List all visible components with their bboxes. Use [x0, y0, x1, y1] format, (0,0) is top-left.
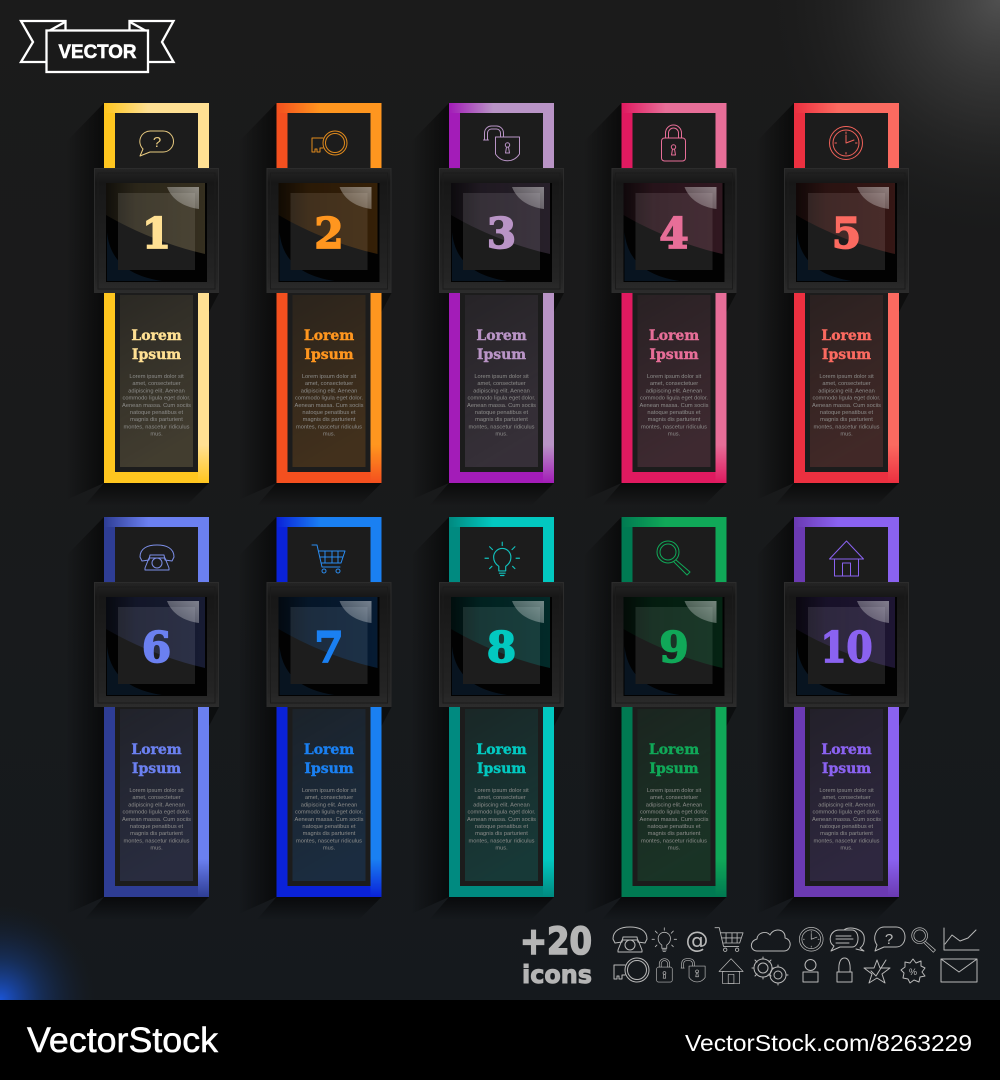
- card 10 number tile: [784, 582, 909, 707]
- card 2 text panel: [292, 295, 366, 467]
- icon: line chart: [944, 928, 979, 950]
- body text: amet, consectetuer: [822, 795, 871, 801]
- icon: telephone: [140, 545, 174, 570]
- icon: question bubble: [140, 131, 174, 156]
- body text: magnis dis parturient: [303, 417, 356, 423]
- label: +20 icons: [520, 920, 592, 989]
- body text: natoque penatibus et: [130, 410, 183, 416]
- heading: Lorem: [821, 328, 872, 344]
- number 7: 7: [314, 623, 344, 672]
- card 8 number tile: [439, 582, 564, 707]
- heading: Ipsum: [477, 347, 526, 363]
- body text: natoque penatibus et: [130, 824, 183, 830]
- body text: amet, consectetuer: [305, 381, 353, 387]
- body text: commodo ligula eget dolor.: [640, 810, 708, 816]
- body text: Lorem ipsum dolor sit: [474, 788, 529, 794]
- icon: woman: [837, 958, 852, 982]
- icon: cloud: [751, 930, 790, 951]
- card 4 frame: [622, 103, 726, 483]
- body text: Aenean massa. Cum sociis: [640, 817, 709, 823]
- body text: montes, nascetur ridiculus: [296, 424, 362, 430]
- heading: Lorem: [821, 742, 872, 758]
- body text: Lorem ipsum dolor sit: [647, 374, 702, 380]
- heading: Lorem: [304, 742, 354, 758]
- card 9 text panel: [638, 709, 710, 881]
- heading: Lorem: [649, 742, 699, 758]
- number 9: 9: [659, 623, 689, 672]
- card 2 number tile: [266, 168, 392, 293]
- body text: magnis dis parturient: [648, 417, 701, 423]
- body text: commodo ligula eget dolor.: [468, 396, 536, 402]
- body text: montes, nascetur ridiculus: [641, 838, 707, 844]
- card 7: [258, 517, 392, 909]
- body text: Aenean massa. Cum sociis: [812, 403, 881, 409]
- card 2 frame: [276, 103, 382, 483]
- number 6: 6: [142, 623, 171, 672]
- icon: house: [719, 959, 743, 984]
- body text: mus.: [150, 846, 163, 852]
- body text: adipiscing elit. Aenean: [818, 802, 875, 808]
- icon: question bubble: [875, 927, 905, 951]
- body text: adipiscing elit. Aenean: [646, 388, 702, 394]
- card 8 text panel: [465, 709, 538, 881]
- body text: montes, nascetur ridiculus: [468, 424, 535, 430]
- body text: montes, nascetur ridiculus: [123, 424, 190, 430]
- card 7 text panel: [292, 709, 366, 881]
- body text: mus.: [323, 846, 336, 852]
- icon: clock: [830, 126, 862, 160]
- body text: adipiscing elit. Aenean: [128, 802, 185, 808]
- body text: natoque penatibus et: [302, 824, 356, 830]
- card 10 frame: [794, 517, 899, 897]
- body text: montes, nascetur ridiculus: [641, 424, 707, 430]
- card 3: [431, 103, 564, 494]
- footer bar: [0, 1000, 1000, 1080]
- icon set: [613, 927, 979, 985]
- card 9: [602, 517, 736, 909]
- body text: commodo ligula eget dolor.: [295, 396, 363, 402]
- body text: Lorem ipsum dolor sit: [474, 374, 529, 380]
- icon: discount burst: [901, 959, 925, 983]
- heading: Lorem: [131, 328, 182, 344]
- number 4: 4: [659, 209, 689, 258]
- icon: key: [614, 958, 649, 982]
- body text: mus.: [668, 432, 681, 438]
- card 1 text panel: [120, 295, 193, 467]
- body text: montes, nascetur ridiculus: [813, 424, 880, 430]
- body text: natoque penatibus et: [475, 824, 528, 830]
- card 5 number tile: [784, 168, 909, 293]
- body text: Aenean massa. Cum sociis: [122, 817, 191, 823]
- number 1: 1: [142, 209, 171, 258]
- footer url: VectorStock.com/8263229: [685, 1030, 972, 1056]
- body text: adipiscing elit. Aenean: [473, 388, 530, 394]
- badge: vector ribbon: VECTOR: [58, 42, 137, 63]
- icon: telephone: [613, 927, 647, 952]
- body text: adipiscing elit. Aenean: [818, 388, 875, 394]
- body text: adipiscing elit. Aenean: [646, 802, 702, 808]
- body text: mus.: [495, 846, 508, 852]
- heading: Lorem: [649, 328, 699, 344]
- body text: commodo ligula eget dolor.: [295, 810, 363, 816]
- body text: montes, nascetur ridiculus: [123, 838, 190, 844]
- heading: Ipsum: [822, 347, 871, 363]
- icon: magnifier: [912, 928, 935, 952]
- body text: mus.: [668, 846, 681, 852]
- heading: Ipsum: [822, 761, 871, 777]
- body text: Lorem ipsum dolor sit: [819, 788, 874, 794]
- card 5: [776, 103, 909, 494]
- body text: magnis dis parturient: [130, 417, 183, 423]
- card 6 frame: [104, 517, 209, 897]
- body text: natoque penatibus et: [647, 410, 701, 416]
- card 9 frame: [622, 517, 726, 897]
- card 3 text panel: [465, 295, 538, 467]
- body text: magnis dis parturient: [303, 831, 356, 837]
- body text: Lorem ipsum dolor sit: [302, 788, 357, 794]
- icon: at sign: @: [686, 928, 708, 954]
- body text: commodo ligula eget dolor.: [123, 396, 191, 402]
- heading: Ipsum: [132, 347, 181, 363]
- body text: commodo ligula eget dolor.: [813, 396, 881, 402]
- body text: amet, consectetuer: [822, 381, 871, 387]
- body text: Lorem ipsum dolor sit: [819, 374, 874, 380]
- body text: Lorem ipsum dolor sit: [302, 374, 357, 380]
- card 6 text panel: [120, 709, 193, 881]
- body text: amet, consectetuer: [477, 795, 526, 801]
- body text: magnis dis parturient: [130, 831, 183, 837]
- body text: natoque penatibus et: [820, 410, 873, 416]
- icon: magnifier: [657, 541, 690, 575]
- card 3 number tile: [439, 168, 564, 293]
- icon: key: [312, 131, 347, 155]
- body text: montes, nascetur ridiculus: [468, 838, 535, 844]
- body text: commodo ligula eget dolor.: [813, 810, 881, 816]
- body text: adipiscing elit. Aenean: [301, 802, 357, 808]
- heading: Ipsum: [132, 761, 181, 777]
- body text: Aenean massa. Cum sociis: [812, 817, 881, 823]
- body text: amet, consectetuer: [305, 795, 353, 801]
- card 1 frame: [104, 103, 209, 483]
- body text: natoque penatibus et: [475, 410, 528, 416]
- heading: Lorem: [131, 742, 182, 758]
- heading: Ipsum: [477, 761, 526, 777]
- icon: question bubble: ?: [153, 134, 161, 151]
- body text: mus.: [840, 432, 853, 438]
- icon: man: [803, 960, 818, 982]
- body text: mus.: [150, 432, 163, 438]
- body text: montes, nascetur ridiculus: [296, 838, 362, 844]
- body text: amet, consectetuer: [132, 381, 181, 387]
- body text: amet, consectetuer: [650, 795, 698, 801]
- body text: mus.: [495, 432, 508, 438]
- body text: montes, nascetur ridiculus: [813, 838, 880, 844]
- card 1 number tile: [94, 168, 219, 293]
- heading: Ipsum: [649, 761, 699, 777]
- heading: Lorem: [304, 328, 354, 344]
- heading: Lorem: [476, 328, 527, 344]
- icon: cart: [715, 928, 743, 952]
- body text: Aenean massa. Cum sociis: [295, 403, 364, 409]
- body text: amet, consectetuer: [477, 381, 526, 387]
- body text: adipiscing elit. Aenean: [301, 388, 357, 394]
- card 4 text panel: [638, 295, 710, 467]
- card 10: [774, 517, 909, 909]
- body text: natoque penatibus et: [820, 824, 873, 830]
- body text: amet, consectetuer: [132, 795, 181, 801]
- icon: question bubble: ?: [885, 931, 893, 948]
- body text: amet, consectetuer: [650, 381, 698, 387]
- icon: star: [864, 960, 890, 983]
- heading: Ipsum: [304, 347, 354, 363]
- label: +20 icons: icons: [522, 960, 592, 989]
- heading: Ipsum: [304, 761, 354, 777]
- body text: Aenean massa. Cum sociis: [467, 817, 536, 823]
- body text: mus.: [323, 432, 336, 438]
- card 7 frame: [276, 517, 382, 897]
- number 3: 3: [487, 209, 516, 258]
- body text: Lorem ipsum dolor sit: [129, 374, 184, 380]
- body text: Aenean massa. Cum sociis: [467, 403, 536, 409]
- footer logo: VectorStock: [27, 1021, 219, 1060]
- card 10 text panel: [810, 709, 883, 881]
- body text: Lorem ipsum dolor sit: [647, 788, 702, 794]
- card 2: [258, 103, 392, 494]
- body text: commodo ligula eget dolor.: [468, 810, 536, 816]
- icon: clock: [799, 927, 823, 951]
- number 2: 2: [314, 209, 344, 258]
- body text: Aenean massa. Cum sociis: [122, 403, 191, 409]
- card 4 number tile: [612, 168, 736, 293]
- icon: open lock: [484, 126, 520, 161]
- card 8: [430, 517, 564, 909]
- heading: Ipsum: [649, 347, 699, 363]
- body text: magnis dis parturient: [648, 831, 701, 837]
- heading: Lorem: [476, 742, 527, 758]
- icon: house: [830, 541, 864, 576]
- number 10: 10: [820, 623, 872, 672]
- body text: magnis dis parturient: [820, 831, 873, 837]
- icon: shopping cart: [312, 545, 345, 573]
- body text: Aenean massa. Cum sociis: [640, 403, 709, 409]
- icon: open lock: [681, 959, 705, 982]
- icon: lock: [657, 959, 672, 982]
- body text: adipiscing elit. Aenean: [128, 388, 185, 394]
- card 1: [86, 103, 219, 494]
- card 3 frame: [449, 103, 554, 483]
- icon: discount burst: %: [909, 967, 917, 977]
- body text: commodo ligula eget dolor.: [640, 396, 708, 402]
- card 5 frame: [794, 103, 899, 483]
- body text: magnis dis parturient: [475, 831, 528, 837]
- icon: lock: [662, 125, 686, 161]
- card 4: [604, 103, 736, 494]
- body text: Lorem ipsum dolor sit: [129, 788, 184, 794]
- body text: natoque penatibus et: [647, 824, 701, 830]
- card 9 number tile: [612, 582, 736, 707]
- body text: commodo ligula eget dolor.: [123, 810, 191, 816]
- icon: bulb: [652, 928, 677, 952]
- body text: mus.: [840, 846, 853, 852]
- body text: magnis dis parturient: [820, 417, 873, 423]
- body text: magnis dis parturient: [475, 417, 528, 423]
- icon: speech bubbles: [830, 928, 864, 951]
- card 8 frame: [449, 517, 554, 897]
- icon: light bulb: [485, 542, 520, 576]
- body text: Aenean massa. Cum sociis: [295, 817, 364, 823]
- card 6 number tile: [94, 582, 219, 707]
- number 8: 8: [487, 623, 516, 672]
- body text: natoque penatibus et: [302, 410, 356, 416]
- card 7 number tile: [266, 582, 392, 707]
- icon: envelope: [941, 959, 977, 982]
- card 5 text panel: [810, 295, 883, 467]
- badge: vector ribbon: [21, 21, 174, 72]
- number 5: 5: [832, 209, 861, 258]
- body text: adipiscing elit. Aenean: [473, 802, 530, 808]
- label: +20 icons: +20: [520, 920, 592, 963]
- icon: gears: [752, 957, 788, 985]
- card 6: [84, 517, 219, 909]
